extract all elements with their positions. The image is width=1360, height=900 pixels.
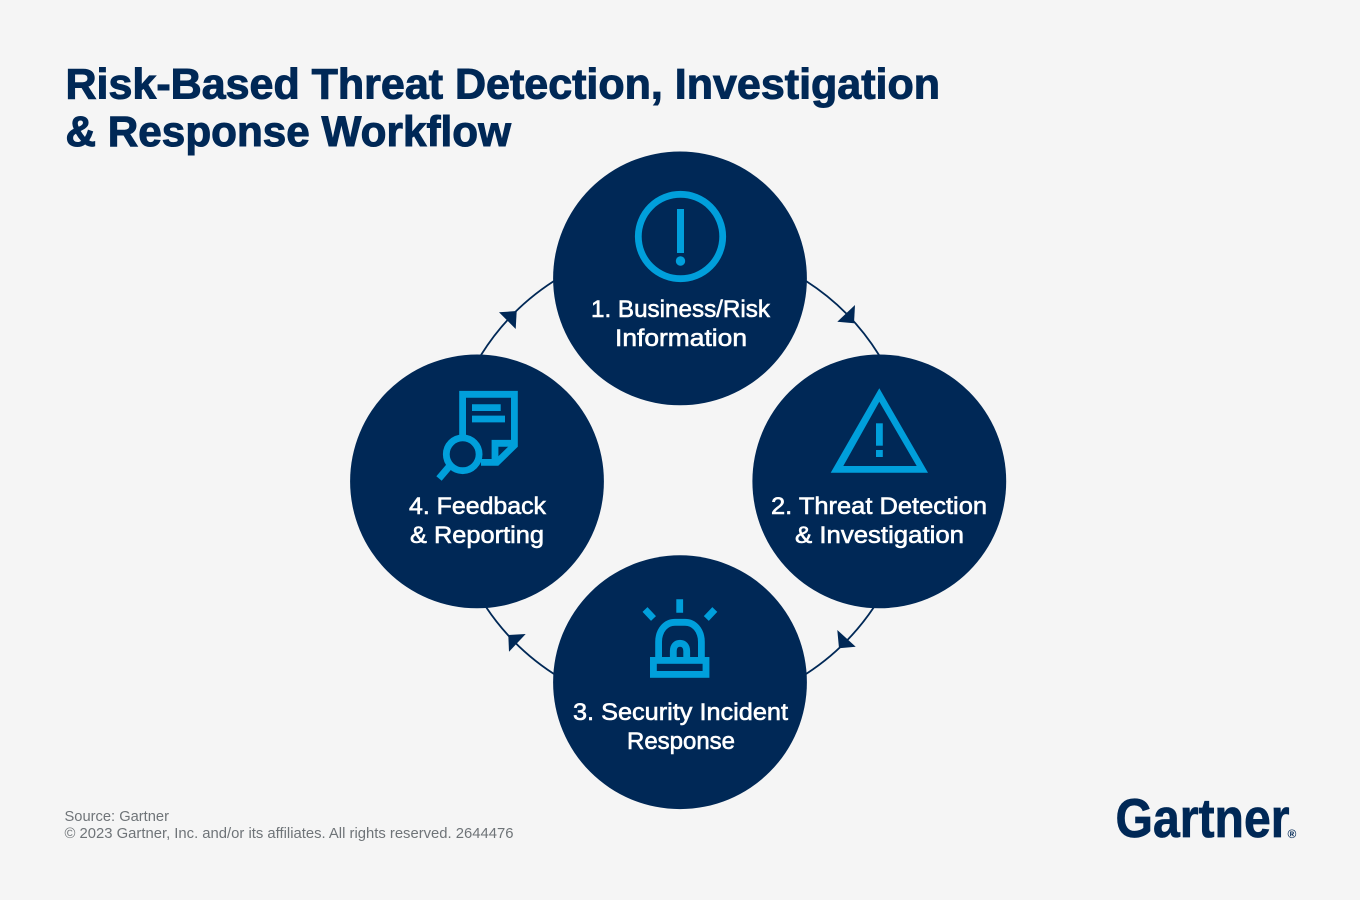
label: step 2 [771,493,987,549]
panel: step 4 feedback and reporting [350,354,604,608]
cycle arrows [481,281,879,674]
arrow: step 2 to step 3 [806,607,874,674]
icon: siren [645,599,715,674]
source note: © 2023 Gartner, Inc. and/or its affiliates. All rights reserved. 2644476 [64,825,514,842]
label: step 4 [409,493,547,549]
icon: exclamation circle [638,194,723,279]
label: step 3: 3. Security Incident [573,699,788,726]
label: step 4: 4. Feedback [409,493,547,520]
icon: document with magnifier [439,394,514,478]
label: step 1: 1. Business/Risk [591,296,771,323]
title: Risk-Based Threat Detection, Investigation [66,60,940,108]
source note: Source: Gartner [64,808,169,825]
panel: step 1 business/risk information [553,152,807,405]
label: step 1: Information [615,325,747,352]
label: step 4: & Reporting [410,522,544,549]
label: step 2: & Investigation [795,522,964,549]
arrow: step 3 to step 4 [486,607,554,674]
label: step 3 [573,699,788,755]
label: step 1 [591,296,771,352]
arrow: step 4 to step 1 [481,281,554,355]
logo: Gartner: Gartner [1116,788,1290,850]
label: step 2: 2. Threat Detection [771,493,987,520]
source note [64,808,514,842]
panel: step 3 security incident response [553,555,807,809]
panel: step 2 threat detection and investigation [752,354,1006,608]
arrow: step 1 to step 2 [806,281,879,355]
title [66,60,940,156]
label: step 3: Response [627,728,735,755]
logo: Gartner: ® [1288,827,1296,841]
icon: warning triangle [831,388,928,473]
title: & Response Workflow [66,108,512,156]
